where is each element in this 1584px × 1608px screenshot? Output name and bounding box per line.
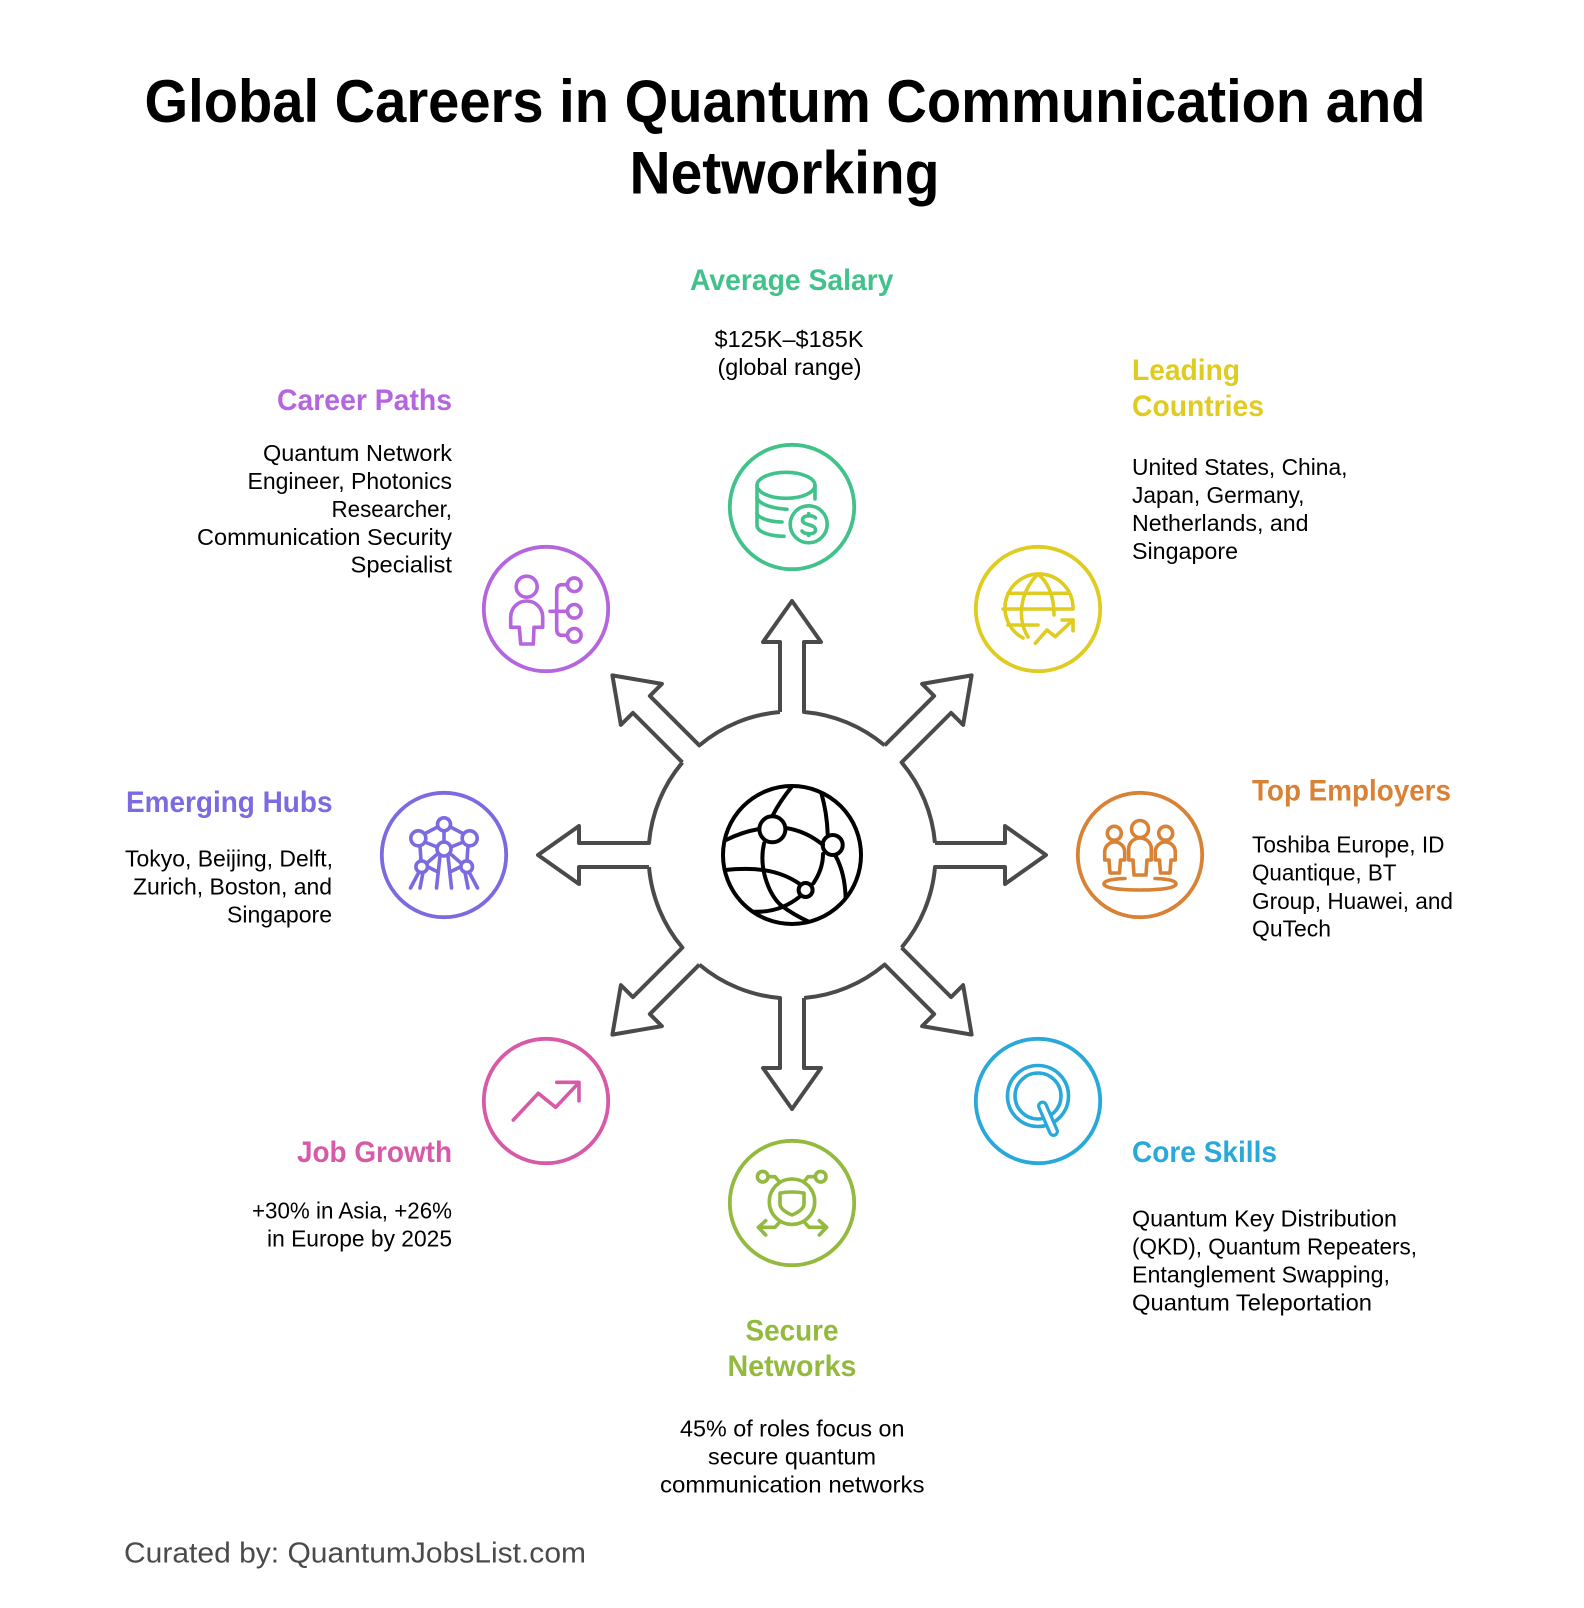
title [144, 68, 1426, 206]
panel: Average Salary [690, 264, 894, 569]
heading: Leading Countries [1132, 354, 1264, 423]
text: countries list: Netherlands, and [1132, 510, 1308, 536]
heading: Leading Countries: Leading [1132, 354, 1240, 387]
text: skills list [1132, 1206, 1417, 1316]
panel: Core Skills [976, 1039, 1417, 1316]
icon: atomium landmark [382, 793, 506, 917]
text: hub cities [125, 846, 333, 928]
heading: Leading Countries: Countries [1132, 390, 1264, 423]
icon: central network globe [723, 786, 861, 924]
heading: Core Skills: Core Skills [1132, 1136, 1277, 1169]
text: skills list: Quantum Teleportation [1132, 1290, 1372, 1316]
panel: Secure Networks [660, 1141, 924, 1498]
central hub with eight radiating arrows [538, 601, 1046, 1109]
text: countries list: United States, China, [1132, 454, 1348, 480]
text: secure networks description [660, 1416, 924, 1498]
text: employers list: Group, Huawei, and [1252, 888, 1453, 914]
text: salary range: $125K–$185K [714, 326, 864, 352]
heading: Secure Networks [728, 1315, 856, 1383]
text: career roles: Engineer, Photonics [248, 468, 452, 494]
panel: Emerging Hubs [125, 786, 506, 928]
text: employers list: Toshiba Europe, ID [1252, 832, 1444, 858]
text: employers list [1252, 832, 1453, 942]
text: countries list: Japan, Germany, [1132, 482, 1304, 508]
text: job growth figures [252, 1198, 452, 1252]
heading: Secure Networks: Secure [746, 1315, 838, 1348]
text: hub cities: Zurich, Boston, and [133, 874, 332, 900]
text: secure networks description: communication networks [660, 1472, 924, 1498]
icon: group of three people [1078, 793, 1202, 917]
text: countries list: Singapore [1132, 538, 1238, 564]
title: Global Careers in Quantum Communication and [144, 68, 1426, 135]
panel: Job Growth [252, 1039, 608, 1252]
title: Networking [630, 140, 940, 206]
heading: Top Employers: Top Employers [1252, 774, 1451, 808]
icon: shield network [730, 1141, 854, 1265]
panel: Leading Countries [976, 354, 1348, 671]
panel: Career Paths [197, 384, 608, 671]
panel: Top Employers [1078, 774, 1453, 942]
text: hub cities: Tokyo, Beijing, Delft, [125, 846, 333, 872]
heading: Average Salary: Average Salary [690, 264, 894, 297]
footer credit: Curated by: QuantumJobsList.com [124, 1538, 586, 1570]
text: salary range: (global range) [718, 354, 862, 380]
heading: Career Paths: Career Paths [277, 384, 452, 417]
text: career roles: Communication Security [197, 524, 453, 550]
heading: Emerging Hubs: Emerging Hubs [126, 786, 332, 819]
text: skills list: Entanglement Swapping, [1132, 1262, 1390, 1288]
text: skills list: (QKD), Quantum Repeaters, [1132, 1234, 1417, 1260]
text: secure networks description: 45% of roles focus on [680, 1416, 904, 1442]
text: career roles: Quantum Network [263, 440, 452, 466]
text: countries list [1132, 454, 1348, 564]
icon: globe with growth arrow [976, 547, 1100, 671]
text: job growth figures: in Europe by 2025 [267, 1226, 452, 1252]
text: job growth figures: +30% in Asia, +26% [252, 1198, 452, 1224]
text: employers list: QuTech [1252, 916, 1331, 942]
text: career roles: Specialist [350, 552, 453, 578]
text: secure networks description: secure quantum [708, 1444, 876, 1470]
text: skills list: Quantum Key Distribution [1132, 1206, 1397, 1232]
icon: letter Q [976, 1039, 1100, 1163]
icon: person with branching paths [484, 547, 608, 671]
text: career roles: Researcher, [332, 496, 452, 522]
text: hub cities: Singapore [227, 902, 332, 928]
heading: Job Growth: Job Growth [297, 1136, 452, 1169]
icon: trending up arrow [484, 1039, 608, 1163]
text: employers list: Quantique, BT [1252, 860, 1396, 886]
heading: Secure Networks: Networks [728, 1350, 856, 1383]
text: career roles [197, 440, 453, 578]
icon: coins with dollar [730, 445, 854, 569]
text: salary range [714, 326, 864, 380]
